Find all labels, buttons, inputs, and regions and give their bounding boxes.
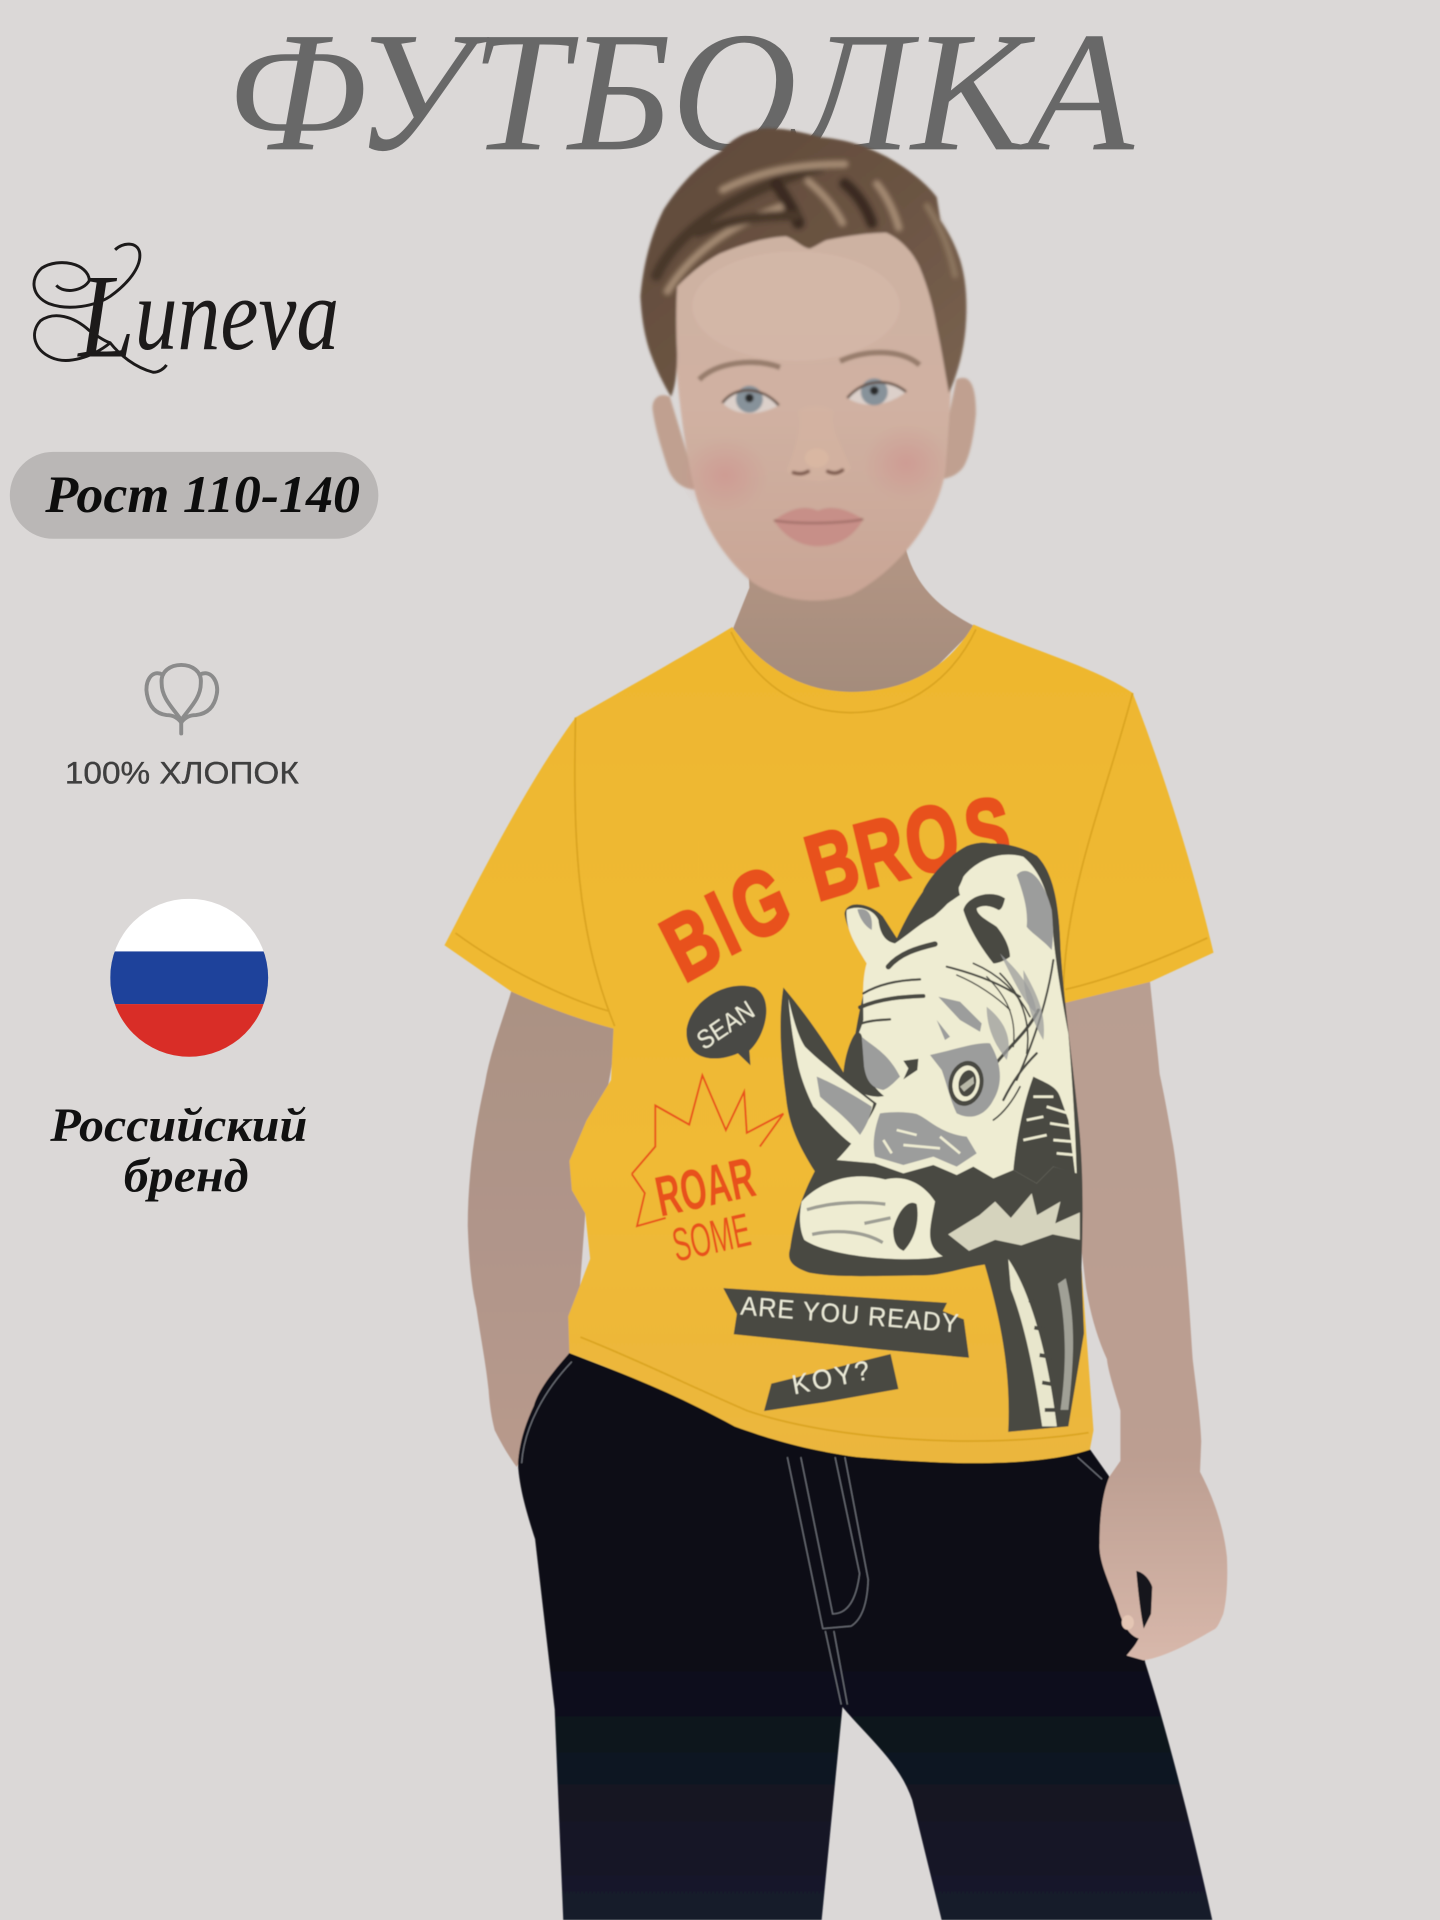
boy figure bbox=[444, 128, 1227, 1920]
eyes bbox=[722, 378, 906, 413]
head bbox=[640, 128, 976, 601]
print: rhino body bbox=[781, 843, 1084, 1432]
print: BIG BROS lettering: O bbox=[898, 784, 966, 895]
rhino head: wrinkles bbox=[860, 944, 1053, 1120]
hair bbox=[640, 128, 966, 397]
rhino head: grey around eye bbox=[930, 1043, 1000, 1117]
cotton label: 100% ХЛОПОК bbox=[65, 755, 299, 791]
print: are you ready banner bbox=[723, 1288, 969, 1411]
brand origin text: бренд bbox=[124, 1149, 249, 1202]
rhino head: eye bbox=[944, 1058, 988, 1109]
print: BIG BROS lettering: B bbox=[796, 808, 869, 921]
t-shirt bbox=[444, 624, 1213, 1463]
icon: Russian flag bbox=[110, 899, 269, 1058]
print: BIG BROS lettering bbox=[647, 779, 1014, 1001]
rhino: front leg bbox=[1008, 1259, 1057, 1426]
height badge: Рост 110-140 bbox=[44, 466, 360, 524]
left arm bbox=[468, 989, 618, 1467]
print: BIG BROS lettering: I bbox=[693, 873, 752, 974]
icon: cotton boll bbox=[146, 665, 217, 733]
rhino head: mane and ear shadows bbox=[912, 843, 1000, 924]
neck bbox=[732, 539, 976, 722]
rhino: muzzle bbox=[800, 1176, 943, 1259]
height badge bbox=[10, 452, 378, 539]
lips bbox=[774, 508, 863, 546]
rhino: neck fur bbox=[948, 1193, 1080, 1251]
brand logo: L bbox=[77, 249, 135, 382]
print: roar burst: ROAR bbox=[650, 1145, 760, 1229]
print: roar burst bbox=[632, 1075, 783, 1272]
brand logo: uneva bbox=[135, 258, 339, 372]
print: are you ready banner: ARE YOU READY bbox=[740, 1292, 960, 1339]
print: speech bubble: SEAN bbox=[692, 996, 760, 1056]
title: ФУТБОЛКА bbox=[227, 0, 1135, 187]
rhino head: lower right fur bbox=[1013, 1077, 1075, 1183]
brand origin text: Российский bbox=[49, 1099, 307, 1152]
rhino head: big horn bbox=[788, 998, 873, 1145]
rhino head: snout grey bbox=[874, 1112, 977, 1167]
print: BIG BROS lettering: R bbox=[845, 796, 916, 909]
face bbox=[673, 213, 955, 601]
rhino head: grey streaks bbox=[937, 997, 982, 1040]
print: are you ready banner: KOY? bbox=[789, 1355, 872, 1401]
jeans bbox=[518, 1353, 1212, 1920]
eyebrows bbox=[699, 362, 780, 380]
right arm and hand bbox=[1058, 980, 1227, 1660]
brand logo bbox=[34, 244, 339, 382]
ears bbox=[653, 395, 698, 490]
rhino head: left face shadow bbox=[843, 1032, 884, 1097]
nose bbox=[786, 406, 851, 481]
rhino head: cream base bbox=[837, 855, 1077, 1183]
t-shirt print bbox=[632, 779, 1084, 1432]
print: BIG BROS lettering: B bbox=[647, 886, 736, 1001]
print: BIG BROS lettering: G bbox=[716, 846, 804, 962]
rhino head: grey flank bbox=[1017, 871, 1053, 950]
print: rhino head detail bbox=[788, 843, 1077, 1183]
hair strands bbox=[656, 164, 955, 291]
print: BIG BROS lettering: S bbox=[960, 779, 1014, 886]
print: roar burst: SOME bbox=[668, 1203, 755, 1272]
brand origin text bbox=[49, 1099, 307, 1202]
